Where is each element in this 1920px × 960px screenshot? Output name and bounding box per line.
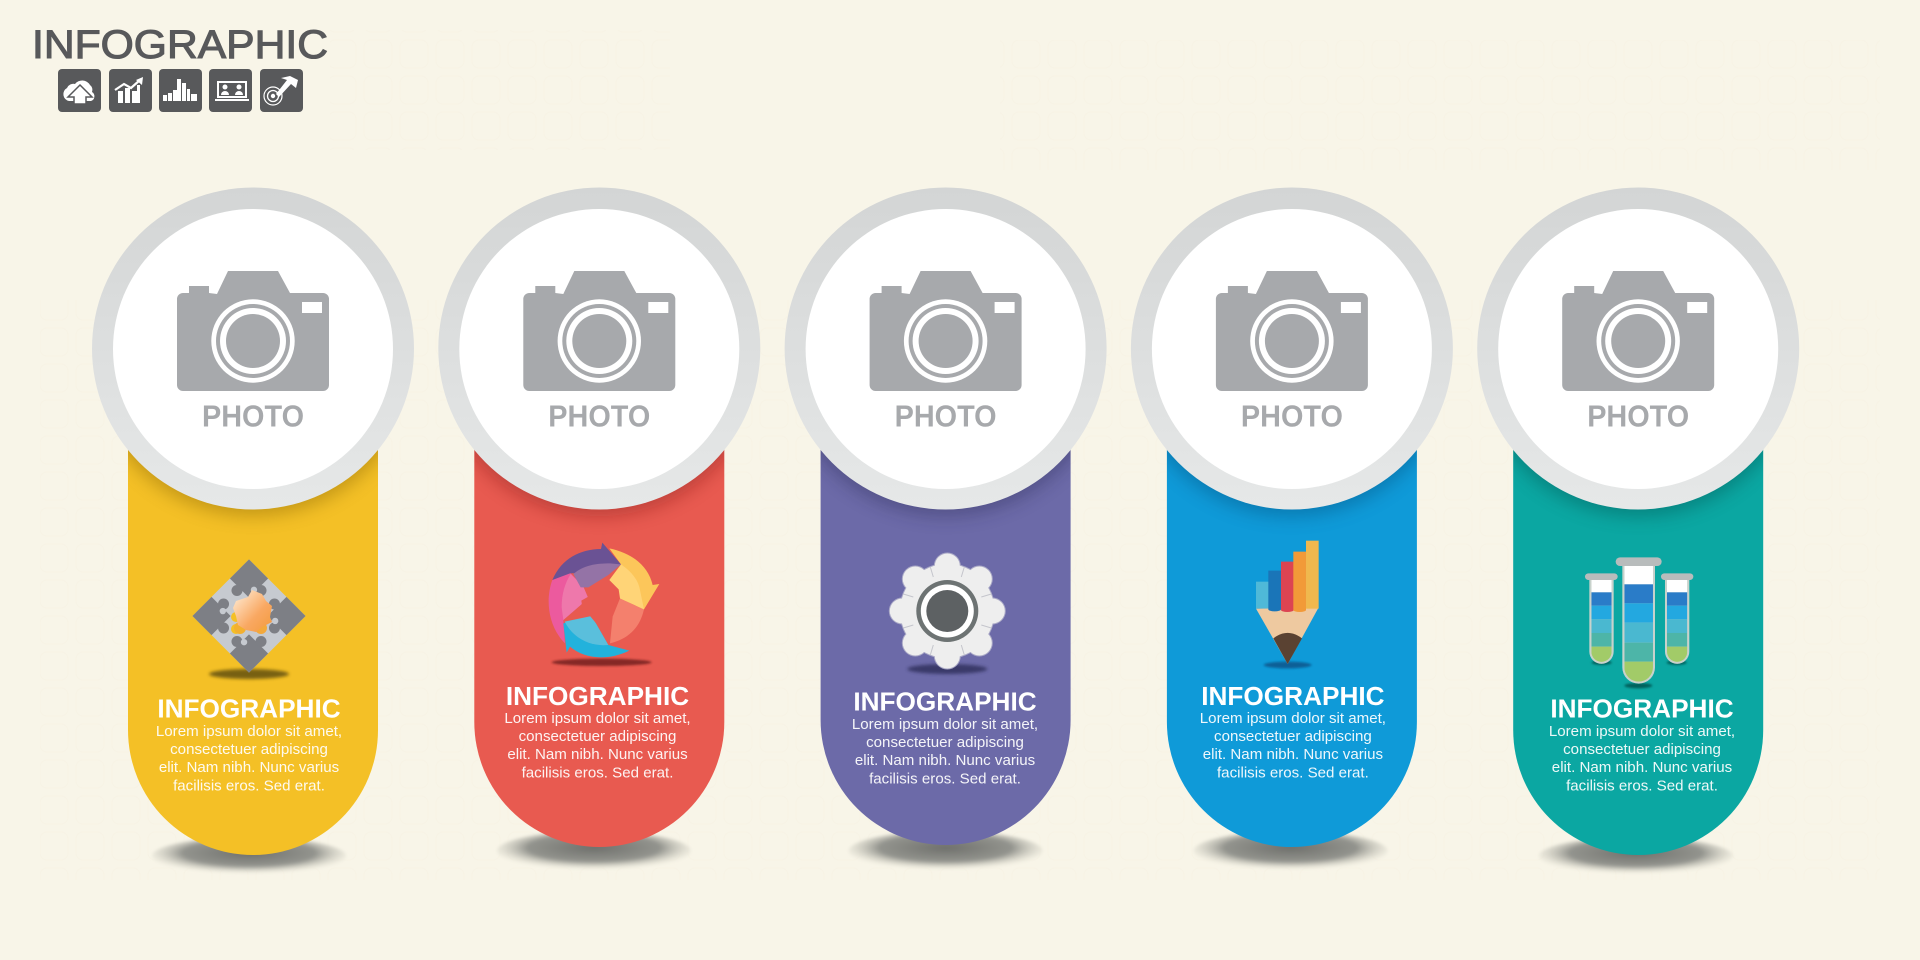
header: infographic logo — [32, 23, 328, 112]
photo circle — [785, 188, 1107, 510]
heading: INFOGRAPHIC — [853, 686, 1037, 716]
text block: elit. Nam nibh. Nunc varius — [507, 746, 688, 763]
text block: Lorem ipsum dolor sit amet, — [156, 723, 342, 740]
base shadow — [152, 837, 346, 875]
text block: Lorem ipsum dolor sit amet, — [1200, 710, 1386, 727]
photo circle — [1131, 188, 1453, 510]
text block: consectetuer adipiscing — [519, 728, 676, 745]
pill — [821, 440, 1071, 845]
text block: facilisis eros. Sed erat. — [173, 778, 325, 794]
title: INFOGRAPHIC — [32, 23, 328, 67]
icon: rising chart — [109, 69, 152, 112]
text block: facilisis eros. Sed erat. — [522, 764, 673, 782]
text block: elit. Nam nibh. Nunc varius — [159, 759, 339, 776]
icon: histogram — [159, 69, 202, 112]
text block: consectetuer adipiscing — [170, 741, 328, 758]
icon: camera — [523, 271, 675, 391]
pill — [128, 440, 378, 855]
text block: facilisis eros. Sed erat. — [869, 770, 1021, 788]
photo label: PHOTO — [202, 398, 304, 434]
icon: test tubes — [1585, 557, 1693, 688]
heading: INFOGRAPHIC — [157, 694, 341, 724]
base shadow — [497, 831, 691, 871]
text block — [504, 710, 691, 782]
text block: Lorem ipsum dolor sit amet, — [852, 716, 1038, 733]
text block: consectetuer adipiscing — [1563, 741, 1721, 758]
pill — [1167, 440, 1417, 847]
icon: camera — [1216, 271, 1368, 391]
photo circle — [92, 188, 414, 510]
text block: facilisis eros. Sed erat. — [1566, 778, 1718, 794]
text block — [156, 723, 342, 794]
photo label: PHOTO — [548, 398, 650, 434]
icon: camera — [177, 271, 329, 391]
icon: puzzle — [192, 559, 306, 679]
photo circle — [438, 188, 760, 510]
text block: Lorem ipsum dolor sit amet, — [504, 710, 691, 727]
text block — [852, 716, 1038, 788]
text block — [1549, 723, 1735, 794]
photo label: PHOTO — [895, 398, 997, 434]
heading: INFOGRAPHIC — [1201, 681, 1385, 711]
pill — [1513, 440, 1763, 855]
photo label: PHOTO — [1587, 398, 1689, 434]
icon: target and arrow — [260, 69, 303, 112]
text block — [1200, 710, 1386, 782]
panel: blue column — [1129, 188, 1455, 871]
text block: elit. Nam nibh. Nunc varius — [1203, 746, 1383, 763]
icon: camera — [1562, 271, 1714, 391]
photo circle — [1477, 188, 1799, 510]
text block: elit. Nam nibh. Nunc varius — [855, 752, 1035, 769]
text block: elit. Nam nibh. Nunc varius — [1552, 759, 1732, 776]
panel: purple column — [783, 188, 1109, 871]
pill — [474, 440, 724, 847]
base shadow — [1539, 837, 1733, 875]
text block: Lorem ipsum dolor sit amet, — [1549, 723, 1735, 740]
panel: yellow column — [90, 188, 416, 875]
text block: consectetuer adipiscing — [866, 734, 1024, 751]
panel: teal column — [1475, 188, 1801, 875]
panel: red column — [436, 188, 762, 871]
heading: INFOGRAPHIC — [506, 681, 689, 711]
icon: cloud upload — [58, 69, 101, 112]
text block: facilisis eros. Sed erat. — [1217, 764, 1369, 782]
icon: pencil chart — [1256, 541, 1319, 668]
heading: INFOGRAPHIC — [1550, 694, 1734, 724]
icon: cycle arrows — [549, 543, 659, 666]
icon: camera — [870, 271, 1022, 391]
icon: gear — [899, 563, 995, 674]
icon: laptop — [209, 69, 252, 112]
photo label: PHOTO — [1241, 398, 1343, 434]
text block: consectetuer adipiscing — [1214, 728, 1372, 745]
base shadow — [1194, 831, 1388, 871]
base shadow — [849, 831, 1043, 871]
